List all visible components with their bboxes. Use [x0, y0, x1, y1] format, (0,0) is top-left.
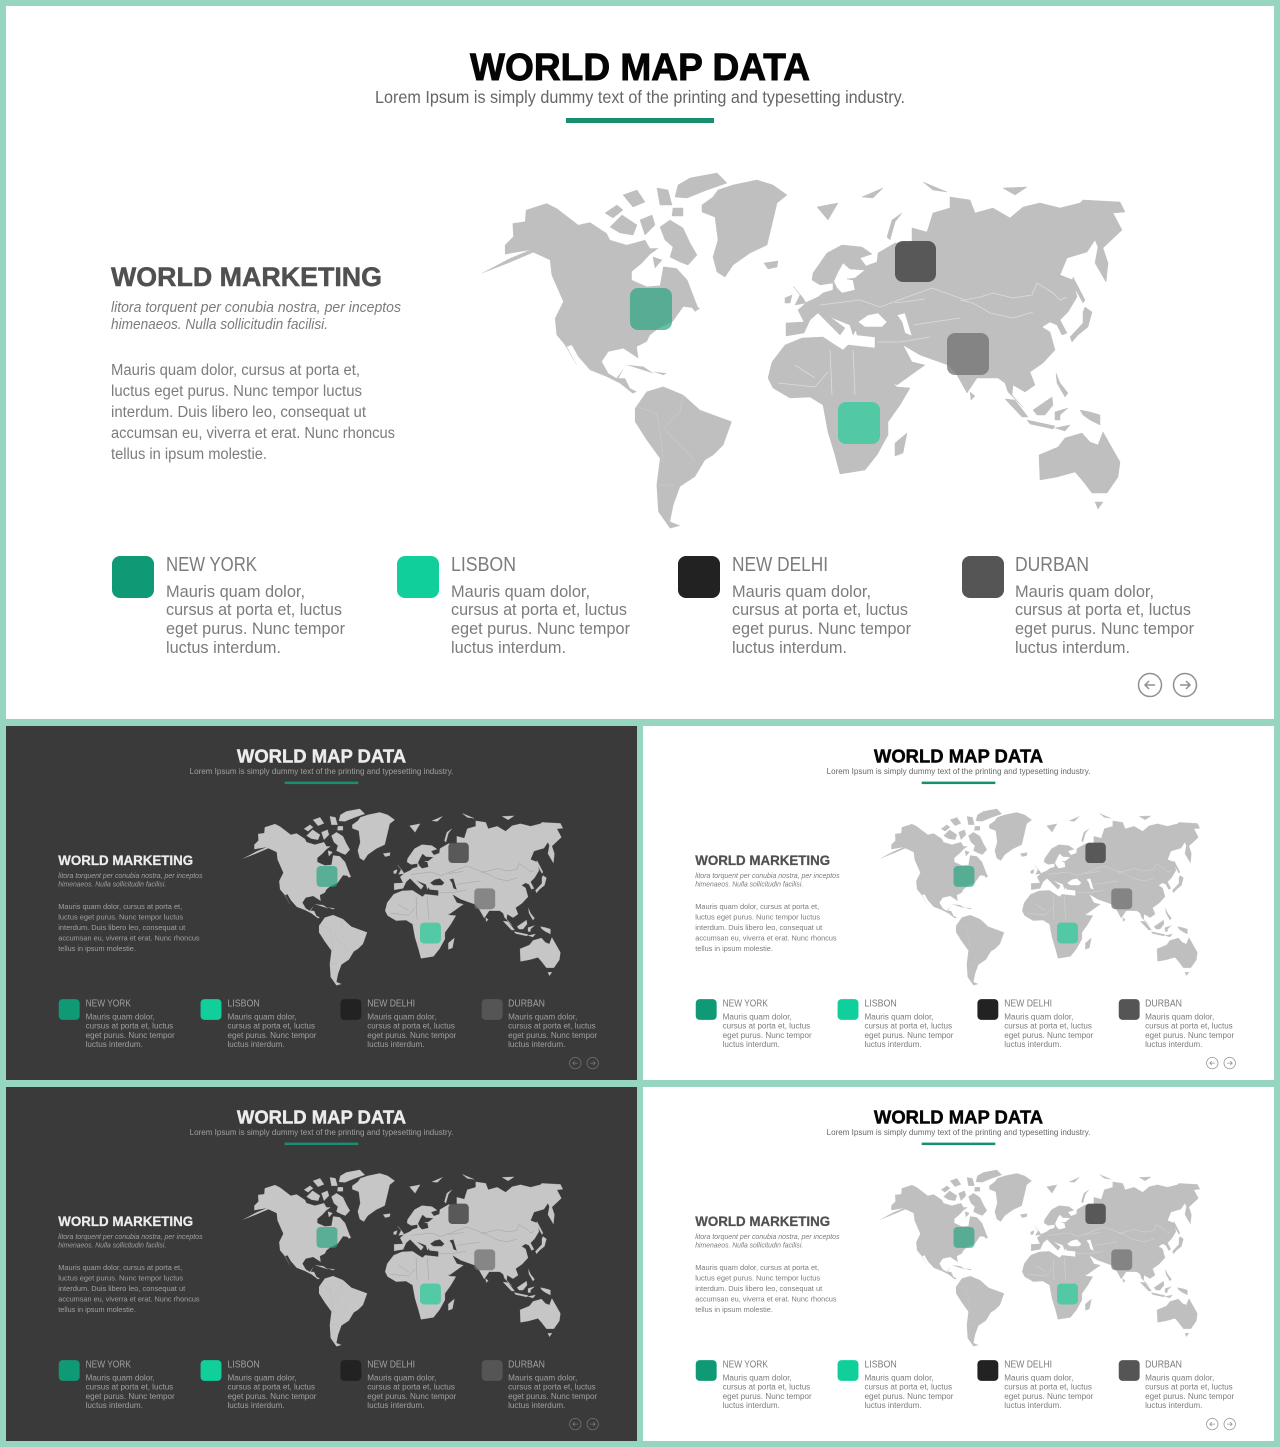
- body paragraph: Mauris quam dolor, cursus at porta et,: [695, 902, 819, 911]
- legend: new york: luctus interdum.: [723, 1401, 780, 1410]
- italic intro: himenaeos. Nulla sollicitudin facilisi.: [695, 879, 803, 888]
- legend: new delhi: eget purus. Nunc tempor: [367, 1392, 457, 1401]
- world map: [880, 1170, 1200, 1346]
- body paragraph: accumsan eu, viverra et erat. Nunc rhoncus: [695, 1294, 837, 1303]
- navigation arrows: [1207, 1418, 1235, 1430]
- panel: light slide top: [643, 726, 1274, 1080]
- legend: new york: eget purus. Nunc tempor: [723, 1031, 812, 1040]
- legend: durban: DURBAN: [1145, 999, 1182, 1010]
- legend: new delhi: eget purus. Nunc tempor: [367, 1031, 457, 1040]
- legend: durban: cursus at porta et, luctus: [508, 1382, 596, 1391]
- legend: lisbon: Mauris quam dolor,: [864, 1373, 934, 1382]
- legend: new york: NEW YORK: [723, 1360, 768, 1371]
- body paragraph: luctus eget purus. Nunc tempor luctus: [58, 1274, 183, 1283]
- legend: new york: eget purus. Nunc tempor: [86, 1031, 175, 1040]
- body paragraph: accumsan eu, viverra et erat. Nunc rhoncus: [58, 933, 200, 942]
- italic intro: himenaeos. Nulla sollicitudin facilisi.: [695, 1240, 803, 1249]
- body paragraph: accumsan eu, viverra et erat. Nunc rhoncus: [695, 933, 837, 942]
- legend: new york: luctus interdum.: [723, 1040, 780, 1049]
- world map: [243, 1170, 563, 1346]
- body paragraph: Mauris quam dolor, cursus at porta et,: [111, 362, 360, 379]
- legend: lisbon: LISBON: [451, 554, 516, 576]
- legend: lisbon: luctus interdum.: [864, 1401, 922, 1410]
- legend: new york: luctus interdum.: [166, 639, 281, 657]
- marker: africa: [1057, 923, 1078, 943]
- legend: lisbon: eget purus. Nunc tempor: [864, 1392, 954, 1401]
- marker: india: [1111, 888, 1132, 909]
- legend: new york: luctus interdum.: [86, 1040, 143, 1049]
- legend: new delhi: eget purus. Nunc tempor: [1004, 1031, 1094, 1040]
- title underline: [285, 782, 358, 784]
- legend: durban: luctus interdum.: [508, 1040, 565, 1049]
- marker: russia: [895, 241, 936, 282]
- body paragraph: luctus eget purus. Nunc tempor luctus: [695, 913, 820, 922]
- legend: lisbon: Mauris quam dolor,: [227, 1373, 297, 1382]
- legend: lisbon: LISBON: [864, 999, 897, 1010]
- subtitle: Lorem Ipsum is simply dummy text of the printing and typesetting industry.: [827, 766, 1090, 776]
- body paragraph: tellus in ipsum molestie.: [111, 446, 267, 463]
- legend: new york: luctus interdum.: [86, 1401, 143, 1410]
- body paragraph: Mauris quam dolor, cursus at porta et,: [695, 1263, 819, 1272]
- italic intro: litora torquent per conubia nostra, per inceptos: [58, 871, 203, 880]
- subtitle: Lorem Ipsum is simply dummy text of the printing and typesetting industry.: [190, 766, 453, 776]
- title underline: [922, 782, 995, 784]
- title: WORLD MAP DATA: [874, 1108, 1043, 1129]
- navigation arrows: [1207, 1057, 1235, 1069]
- body paragraph: [58, 1263, 200, 1314]
- legend: new delhi: Mauris quam dolor,: [367, 1373, 436, 1382]
- legend: new delhi: Mauris quam dolor,: [732, 583, 871, 601]
- legend: lisbon: Mauris quam dolor,: [227, 1012, 297, 1021]
- legend: new delhi: cursus at porta et, luctus: [732, 601, 908, 619]
- legend: durban: luctus interdum.: [1145, 1401, 1202, 1410]
- marker: russia: [448, 843, 469, 863]
- body paragraph: accumsan eu, viverra et erat. Nunc rhoncus: [111, 425, 395, 442]
- subtitle: Lorem Ipsum is simply dummy text of the printing and typesetting industry.: [827, 1127, 1090, 1137]
- legend: new york: Mauris quam dolor,: [86, 1012, 155, 1021]
- body paragraph: interdum. Duis libero leo, consequat ut: [58, 1284, 186, 1293]
- legend: new york: NEW YORK: [86, 1360, 131, 1371]
- italic intro: himenaeos. Nulla sollicitudin facilisi.: [58, 879, 166, 888]
- legend: lisbon: LISBON: [864, 1360, 897, 1371]
- navigation arrows: [570, 1057, 598, 1069]
- marker: africa: [420, 1284, 441, 1304]
- body paragraph: accumsan eu, viverra et erat. Nunc rhoncus: [58, 1294, 200, 1303]
- title: WORLD MAP DATA: [237, 747, 406, 768]
- legend: new delhi: luctus interdum.: [1004, 1040, 1062, 1049]
- legend: new york: cursus at porta et, luctus: [86, 1382, 173, 1391]
- legend: new delhi: eget purus. Nunc tempor: [732, 620, 911, 638]
- body paragraph: tellus in ipsum molestie.: [58, 944, 136, 953]
- marker: new york: [317, 866, 337, 887]
- legend: new york: [112, 554, 345, 657]
- marker: russia: [448, 1204, 469, 1224]
- legend: durban: Mauris quam dolor,: [508, 1373, 577, 1382]
- italic intro: [695, 1232, 840, 1249]
- body paragraph: Mauris quam dolor, cursus at porta et,: [58, 902, 182, 911]
- legend: new york: cursus at porta et, luctus: [166, 601, 342, 619]
- heading: world marketing: WORLD MARKETING: [58, 853, 193, 868]
- world map: [880, 809, 1200, 985]
- legend: durban: eget purus. Nunc tempor: [1015, 620, 1194, 638]
- heading: world marketing: WORLD MARKETING: [58, 1214, 193, 1229]
- legend: new delhi: cursus at porta et, luctus: [367, 1382, 455, 1391]
- legend: durban: eget purus. Nunc tempor: [1145, 1031, 1234, 1040]
- legend: new delhi: eget purus. Nunc tempor: [1004, 1392, 1094, 1401]
- body paragraph: [695, 902, 837, 953]
- title: WORLD MAP DATA: [237, 1108, 406, 1129]
- legend: new delhi: [977, 1360, 1094, 1410]
- italic intro: litora torquent per conubia nostra, per inceptos: [58, 1232, 203, 1241]
- legend: new york: eget purus. Nunc tempor: [723, 1392, 812, 1401]
- marker: new york: [630, 288, 672, 330]
- legend: durban: Mauris quam dolor,: [508, 1012, 577, 1021]
- panel: light slide bottom: [643, 1087, 1274, 1441]
- marker: new york: [317, 1227, 337, 1248]
- title underline: [566, 118, 714, 123]
- heading: world marketing: WORLD MARKETING: [695, 1214, 830, 1229]
- legend: durban: DURBAN: [508, 1360, 545, 1371]
- legend: new york: [696, 1360, 812, 1410]
- legend: new york: cursus at porta et, luctus: [86, 1021, 173, 1030]
- legend: lisbon: [201, 1360, 317, 1410]
- heading: world marketing: WORLD MARKETING: [111, 262, 382, 292]
- heading: world marketing: WORLD MARKETING: [695, 853, 830, 868]
- legend: durban: [962, 554, 1194, 657]
- marker: india: [1111, 1249, 1132, 1270]
- legend: lisbon: cursus at porta et, luctus: [227, 1021, 315, 1030]
- body paragraph: interdum. Duis libero leo, consequat ut: [58, 923, 186, 932]
- legend: new delhi: [340, 1360, 457, 1410]
- legend: new delhi: luctus interdum.: [1004, 1401, 1062, 1410]
- marker: russia: [1085, 843, 1106, 863]
- italic intro: himenaeos. Nulla sollicitudin facilisi.: [111, 316, 328, 333]
- title underline: [922, 1143, 995, 1145]
- panel: main slide: [6, 6, 1274, 719]
- legend: lisbon: [838, 999, 954, 1049]
- legend: durban: luctus interdum.: [1145, 1040, 1202, 1049]
- italic intro: litora torquent per conubia nostra, per inceptos: [695, 1232, 840, 1241]
- legend: new york: eget purus. Nunc tempor: [166, 620, 345, 638]
- marker: india: [947, 333, 989, 375]
- navigation arrows: [1138, 674, 1196, 696]
- legend: new york: NEW YORK: [86, 999, 131, 1010]
- legend: new delhi: NEW DELHI: [367, 999, 415, 1010]
- legend: durban: cursus at porta et, luctus: [1145, 1021, 1233, 1030]
- legend: durban: [1119, 999, 1234, 1049]
- legend: lisbon: luctus interdum.: [227, 1040, 285, 1049]
- legend: new delhi: NEW DELHI: [1004, 1360, 1052, 1371]
- legend: new delhi: Mauris quam dolor,: [1004, 1012, 1073, 1021]
- legend: durban: cursus at porta et, luctus: [1145, 1382, 1233, 1391]
- legend: durban: luctus interdum.: [508, 1401, 565, 1410]
- navigation arrows: [570, 1418, 598, 1430]
- body paragraph: [695, 1263, 837, 1314]
- legend: lisbon: [201, 999, 317, 1049]
- italic intro: [111, 299, 401, 333]
- legend: durban: eget purus. Nunc tempor: [508, 1392, 597, 1401]
- legend: durban: Mauris quam dolor,: [1145, 1012, 1214, 1021]
- title: WORLD MAP DATA: [470, 47, 810, 89]
- legend: lisbon: [397, 554, 630, 657]
- body paragraph: [111, 362, 395, 463]
- marker: new york: [954, 866, 974, 887]
- legend: new york: eget purus. Nunc tempor: [86, 1392, 175, 1401]
- legend: durban: DURBAN: [508, 999, 545, 1010]
- legend: lisbon: luctus interdum.: [451, 639, 566, 657]
- legend: new delhi: [977, 999, 1094, 1049]
- legend: durban: Mauris quam dolor,: [1015, 583, 1154, 601]
- body paragraph: interdum. Duis libero leo, consequat ut: [111, 404, 367, 421]
- legend: lisbon: LISBON: [227, 999, 260, 1010]
- legend: new york: cursus at porta et, luctus: [723, 1382, 810, 1391]
- legend: new york: NEW YORK: [166, 554, 258, 576]
- title underline: [285, 1143, 358, 1145]
- legend: lisbon: Mauris quam dolor,: [451, 583, 590, 601]
- marker: africa: [420, 923, 441, 943]
- legend: new delhi: luctus interdum.: [367, 1401, 425, 1410]
- legend: new delhi: cursus at porta et, luctus: [1004, 1382, 1092, 1391]
- body paragraph: luctus eget purus. Nunc tempor luctus: [695, 1274, 820, 1283]
- legend: lisbon: [838, 1360, 954, 1410]
- marker: africa: [838, 402, 880, 444]
- legend: lisbon: eget purus. Nunc tempor: [864, 1031, 954, 1040]
- legend: lisbon: cursus at porta et, luctus: [227, 1382, 315, 1391]
- legend: lisbon: cursus at porta et, luctus: [451, 601, 627, 619]
- body paragraph: [58, 902, 200, 953]
- legend: durban: eget purus. Nunc tempor: [508, 1031, 597, 1040]
- world map: [243, 809, 563, 985]
- legend: durban: Mauris quam dolor,: [1145, 1373, 1214, 1382]
- legend: durban: [482, 999, 597, 1049]
- legend: lisbon: luctus interdum.: [227, 1401, 285, 1410]
- legend: new york: [696, 999, 812, 1049]
- body paragraph: interdum. Duis libero leo, consequat ut: [695, 923, 823, 932]
- italic intro: [58, 1232, 203, 1249]
- body paragraph: interdum. Duis libero leo, consequat ut: [695, 1284, 823, 1293]
- panel: dark slide bottom: [6, 1087, 637, 1441]
- legend: new delhi: luctus interdum.: [367, 1040, 425, 1049]
- legend: durban: eget purus. Nunc tempor: [1145, 1392, 1234, 1401]
- legend: durban: DURBAN: [1145, 1360, 1182, 1371]
- legend: new delhi: [340, 999, 457, 1049]
- legend: lisbon: Mauris quam dolor,: [864, 1012, 934, 1021]
- legend: new york: [59, 1360, 175, 1410]
- legend: lisbon: luctus interdum.: [864, 1040, 922, 1049]
- legend: lisbon: eget purus. Nunc tempor: [227, 1392, 317, 1401]
- legend: durban: cursus at porta et, luctus: [1015, 601, 1191, 619]
- marker: new york: [954, 1227, 974, 1248]
- body paragraph: Mauris quam dolor, cursus at porta et,: [58, 1263, 182, 1272]
- legend: new york: Mauris quam dolor,: [166, 583, 305, 601]
- legend: new york: cursus at porta et, luctus: [723, 1021, 810, 1030]
- subtitle: Lorem Ipsum is simply dummy text of the printing and typesetting industry.: [190, 1127, 453, 1137]
- marker: africa: [1057, 1284, 1078, 1304]
- marker: india: [474, 1249, 495, 1270]
- legend: new york: NEW YORK: [723, 999, 768, 1010]
- legend: lisbon: eget purus. Nunc tempor: [227, 1031, 317, 1040]
- legend: durban: DURBAN: [1015, 554, 1089, 576]
- world map: [482, 173, 1125, 528]
- legend: lisbon: eget purus. Nunc tempor: [451, 620, 630, 638]
- subtitle: Lorem Ipsum is simply dummy text of the printing and typesetting industry.: [375, 87, 905, 107]
- legend: new delhi: Mauris quam dolor,: [367, 1012, 436, 1021]
- legend: lisbon: cursus at porta et, luctus: [864, 1382, 952, 1391]
- legend: new delhi: cursus at porta et, luctus: [367, 1021, 455, 1030]
- panel: dark slide top: [6, 726, 637, 1080]
- legend: new delhi: Mauris quam dolor,: [1004, 1373, 1073, 1382]
- legend: durban: [1119, 1360, 1234, 1410]
- legend: new delhi: NEW DELHI: [367, 1360, 415, 1371]
- marker: india: [474, 888, 495, 909]
- body paragraph: tellus in ipsum molestie.: [58, 1305, 136, 1314]
- title: WORLD MAP DATA: [874, 747, 1043, 768]
- body paragraph: tellus in ipsum molestie.: [695, 944, 773, 953]
- italic intro: [58, 871, 203, 888]
- legend: new delhi: cursus at porta et, luctus: [1004, 1021, 1092, 1030]
- legend: durban: [482, 1360, 597, 1410]
- legend: durban: luctus interdum.: [1015, 639, 1130, 657]
- legend: lisbon: cursus at porta et, luctus: [864, 1021, 952, 1030]
- italic intro: [695, 871, 840, 888]
- italic intro: himenaeos. Nulla sollicitudin facilisi.: [58, 1240, 166, 1249]
- italic intro: litora torquent per conubia nostra, per inceptos: [695, 871, 840, 880]
- legend: new delhi: [678, 554, 911, 657]
- legend: new delhi: NEW DELHI: [732, 554, 828, 576]
- legend: new york: [59, 999, 175, 1049]
- legend: new york: Mauris quam dolor,: [723, 1373, 792, 1382]
- legend: new delhi: NEW DELHI: [1004, 999, 1052, 1010]
- legend: new delhi: luctus interdum.: [732, 639, 847, 657]
- body paragraph: tellus in ipsum molestie.: [695, 1305, 773, 1314]
- legend: durban: cursus at porta et, luctus: [508, 1021, 596, 1030]
- legend: new york: Mauris quam dolor,: [86, 1373, 155, 1382]
- marker: russia: [1085, 1204, 1106, 1224]
- legend: lisbon: LISBON: [227, 1360, 260, 1371]
- italic intro: litora torquent per conubia nostra, per inceptos: [111, 299, 401, 316]
- legend: new york: Mauris quam dolor,: [723, 1012, 792, 1021]
- body paragraph: luctus eget purus. Nunc tempor luctus: [111, 383, 362, 400]
- body paragraph: luctus eget purus. Nunc tempor luctus: [58, 913, 183, 922]
